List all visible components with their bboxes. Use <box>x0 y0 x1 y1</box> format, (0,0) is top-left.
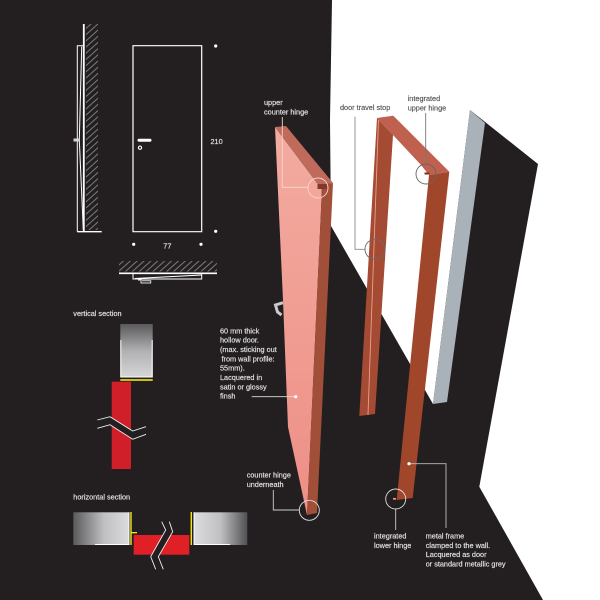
callout: metal frame <box>407 462 506 568</box>
callout: integrated upper hinge <box>408 94 446 184</box>
callout: integrated upper hinge: upper hinge <box>408 104 446 112</box>
door front face <box>275 127 322 515</box>
callout: door description: finsh <box>220 392 235 401</box>
callout: door description: 60 mm thick <box>220 326 260 335</box>
dimension: width: 77 <box>163 242 171 250</box>
callout: integrated lower hinge <box>374 489 411 550</box>
door: 3D view <box>275 126 333 515</box>
vertical section drawing <box>97 324 153 469</box>
callout: door description: 55mm). <box>220 364 245 373</box>
callout: door description: (max. sticking out <box>220 345 277 354</box>
callout: upper counter hinge: upper <box>264 98 283 107</box>
callout: upper counter hinge: counter hinge <box>264 108 308 116</box>
wall panel: grey edge <box>433 110 485 404</box>
plan view drawing <box>119 261 217 283</box>
callout: door description: satin or glossy <box>220 382 267 391</box>
door front elevation <box>133 46 202 232</box>
door handle <box>138 140 150 149</box>
callout: counter hinge underneath: underneath <box>247 480 284 489</box>
door top face <box>275 126 333 184</box>
door side face <box>307 183 333 515</box>
frame left leg <box>359 118 393 416</box>
frame right leg <box>397 172 449 500</box>
callout: upper counter hinge <box>264 98 328 198</box>
callout: counter hinge underneath: counter hinge <box>247 470 291 480</box>
callout: door description: Lacquered in <box>220 373 262 382</box>
callout: integrated lower hinge: integrated <box>374 532 406 540</box>
frame top <box>377 116 449 175</box>
door travel stop strip <box>368 120 378 415</box>
side elevation drawing <box>74 24 102 232</box>
callout: metal frame: clamped to the wall. <box>426 541 490 550</box>
horizontal section drawing <box>73 512 247 569</box>
callout: integrated upper hinge: integrated <box>408 94 440 103</box>
callout: door description <box>220 326 297 401</box>
heading: vertical section: vertical section <box>73 309 122 318</box>
heading: horizontal section: horizontal section <box>73 492 130 502</box>
dimension dots <box>132 44 217 246</box>
callout: metal frame: Lacquered as door <box>426 550 487 559</box>
callout: integrated lower hinge: lower hinge <box>374 541 411 550</box>
frame notch <box>424 172 430 174</box>
callout: door travel stop <box>340 103 390 259</box>
frame: 3D view <box>359 116 449 500</box>
callout: door travel stop: door travel stop <box>340 103 390 112</box>
door handle <box>276 303 283 315</box>
callout: door description: from wall profile: <box>222 354 275 363</box>
callout: counter hinge underneath <box>247 470 319 520</box>
callout: metal frame: or standard metallic grey <box>426 559 506 568</box>
callout: door description: hollow door. <box>220 336 259 345</box>
dimension: height: 210 <box>210 137 223 146</box>
upper hinge notch <box>318 184 327 189</box>
callout: metal frame: metal frame <box>426 532 464 540</box>
